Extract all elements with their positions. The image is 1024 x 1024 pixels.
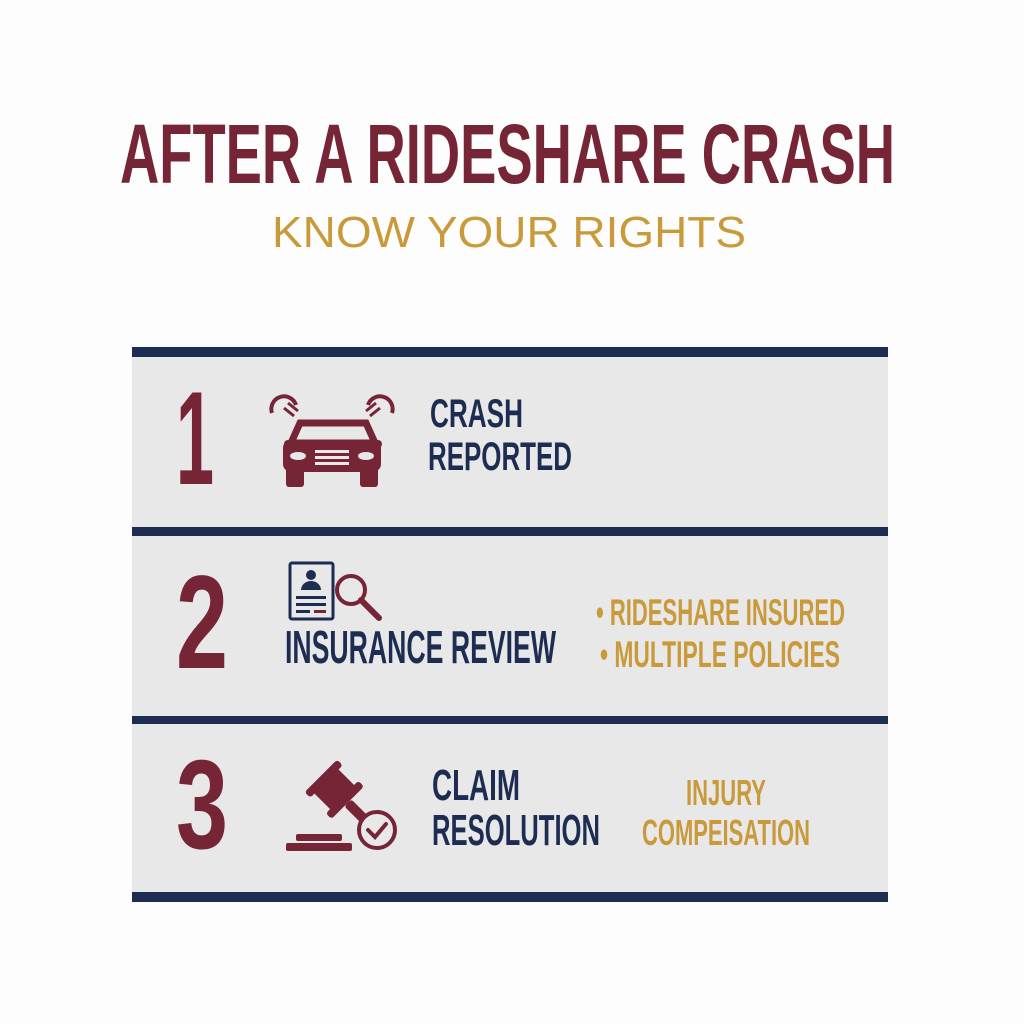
- number 2: 2: [176, 549, 228, 697]
- outcome text: COMPEISATION: [642, 812, 810, 853]
- outcome text: [642, 772, 810, 853]
- number 1: 1: [176, 365, 214, 513]
- step 1: [176, 365, 572, 513]
- number 3: 3: [176, 734, 228, 875]
- label: insurance review: INSURANCE REVIEW: [285, 621, 556, 673]
- label: claim resolution: RESOLUTION: [432, 806, 600, 855]
- step 2: [176, 549, 845, 697]
- bullets: [596, 592, 845, 675]
- icon: document with magnifier: [290, 563, 379, 619]
- label: crash reported: CRASH: [430, 392, 523, 436]
- outcome text: INJURY: [686, 772, 766, 813]
- label: crash reported: [428, 392, 572, 479]
- bullets: • MULTIPLE POLICIES: [600, 634, 840, 675]
- bullets: • RIDESHARE INSURED: [596, 592, 845, 633]
- label: claim resolution: CLAIM: [432, 761, 520, 810]
- step 3: [176, 734, 810, 875]
- icon: car: [271, 396, 393, 487]
- icon: gavel with check: [286, 760, 395, 851]
- subtitle: KNOW YOUR RIGHTS: [272, 208, 746, 257]
- panel: steps: [132, 347, 888, 902]
- label: claim resolution: [432, 761, 600, 855]
- label: crash reported: REPORTED: [428, 435, 572, 479]
